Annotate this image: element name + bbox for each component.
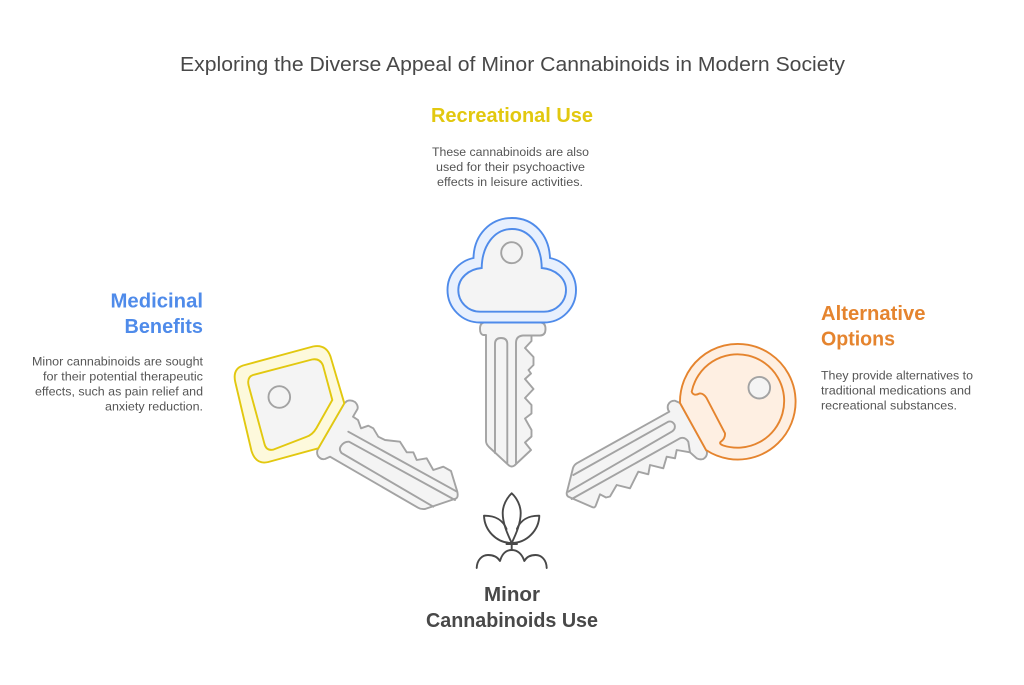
key hole: [748, 377, 770, 399]
key hole: [501, 242, 522, 263]
key head: rounded square: [235, 346, 344, 463]
text block: medicinal benefits description: effects, such as pain relief and: [35, 384, 203, 398]
key head: cloud: [448, 218, 576, 322]
key: recreational use (blue, cloud head): [448, 218, 576, 466]
heading: minor cannabinoids use: Minor: [484, 584, 540, 606]
text block: recreational use description: [432, 145, 589, 189]
text block: medicinal benefits description: Minor cannabinoids are sought: [32, 354, 204, 368]
icon: plant sprout: [477, 493, 547, 568]
title: Exploring the Diverse Appeal of Minor Cannabinoids in Modern Society: [180, 54, 845, 76]
heading: medicinal benefits: Medicinal: [110, 290, 203, 312]
key blade: [480, 322, 546, 466]
panel: recreational use text: [431, 105, 593, 189]
heading: medicinal benefits: Benefits: [124, 316, 203, 338]
key head: circle: [680, 344, 796, 460]
panel: alternative options text: [821, 303, 973, 412]
text block: medicinal benefits description: anxiety reduction.: [105, 400, 203, 414]
heading: recreational use: Recreational Use: [431, 105, 593, 127]
text block: alternative options description: [821, 368, 973, 412]
heading: alternative options: [821, 303, 926, 350]
text block: recreational use description: effects in leisure activities.: [437, 175, 583, 189]
heading: medicinal benefits: [110, 290, 203, 338]
heading: alternative options: Alternative: [821, 303, 926, 325]
text block: medicinal benefits description: for their potential therapeutic: [43, 370, 203, 384]
heading: alternative options: Options: [821, 328, 895, 350]
key blade: [567, 401, 707, 507]
heading: minor cannabinoids use: [426, 584, 598, 632]
heading: minor cannabinoids use: Cannabinoids Use: [426, 610, 598, 632]
text block: recreational use description: These cannabinoids are also: [432, 145, 589, 159]
text block: alternative options description: recreational substances.: [821, 398, 957, 412]
text block: alternative options description: They provide alternatives to: [821, 368, 973, 382]
panel: medicinal benefits text: [32, 290, 204, 414]
text block: medicinal benefits description: [32, 354, 204, 414]
key: alternative options (orange, round head): [567, 344, 796, 507]
text block: alternative options description: traditional medications and: [821, 384, 971, 398]
key: medicinal benefits (yellow, rounded square head): [235, 346, 458, 509]
key blade: [317, 400, 458, 509]
key hole: [268, 386, 290, 408]
text block: recreational use description: used for their psychoactive: [436, 160, 585, 174]
